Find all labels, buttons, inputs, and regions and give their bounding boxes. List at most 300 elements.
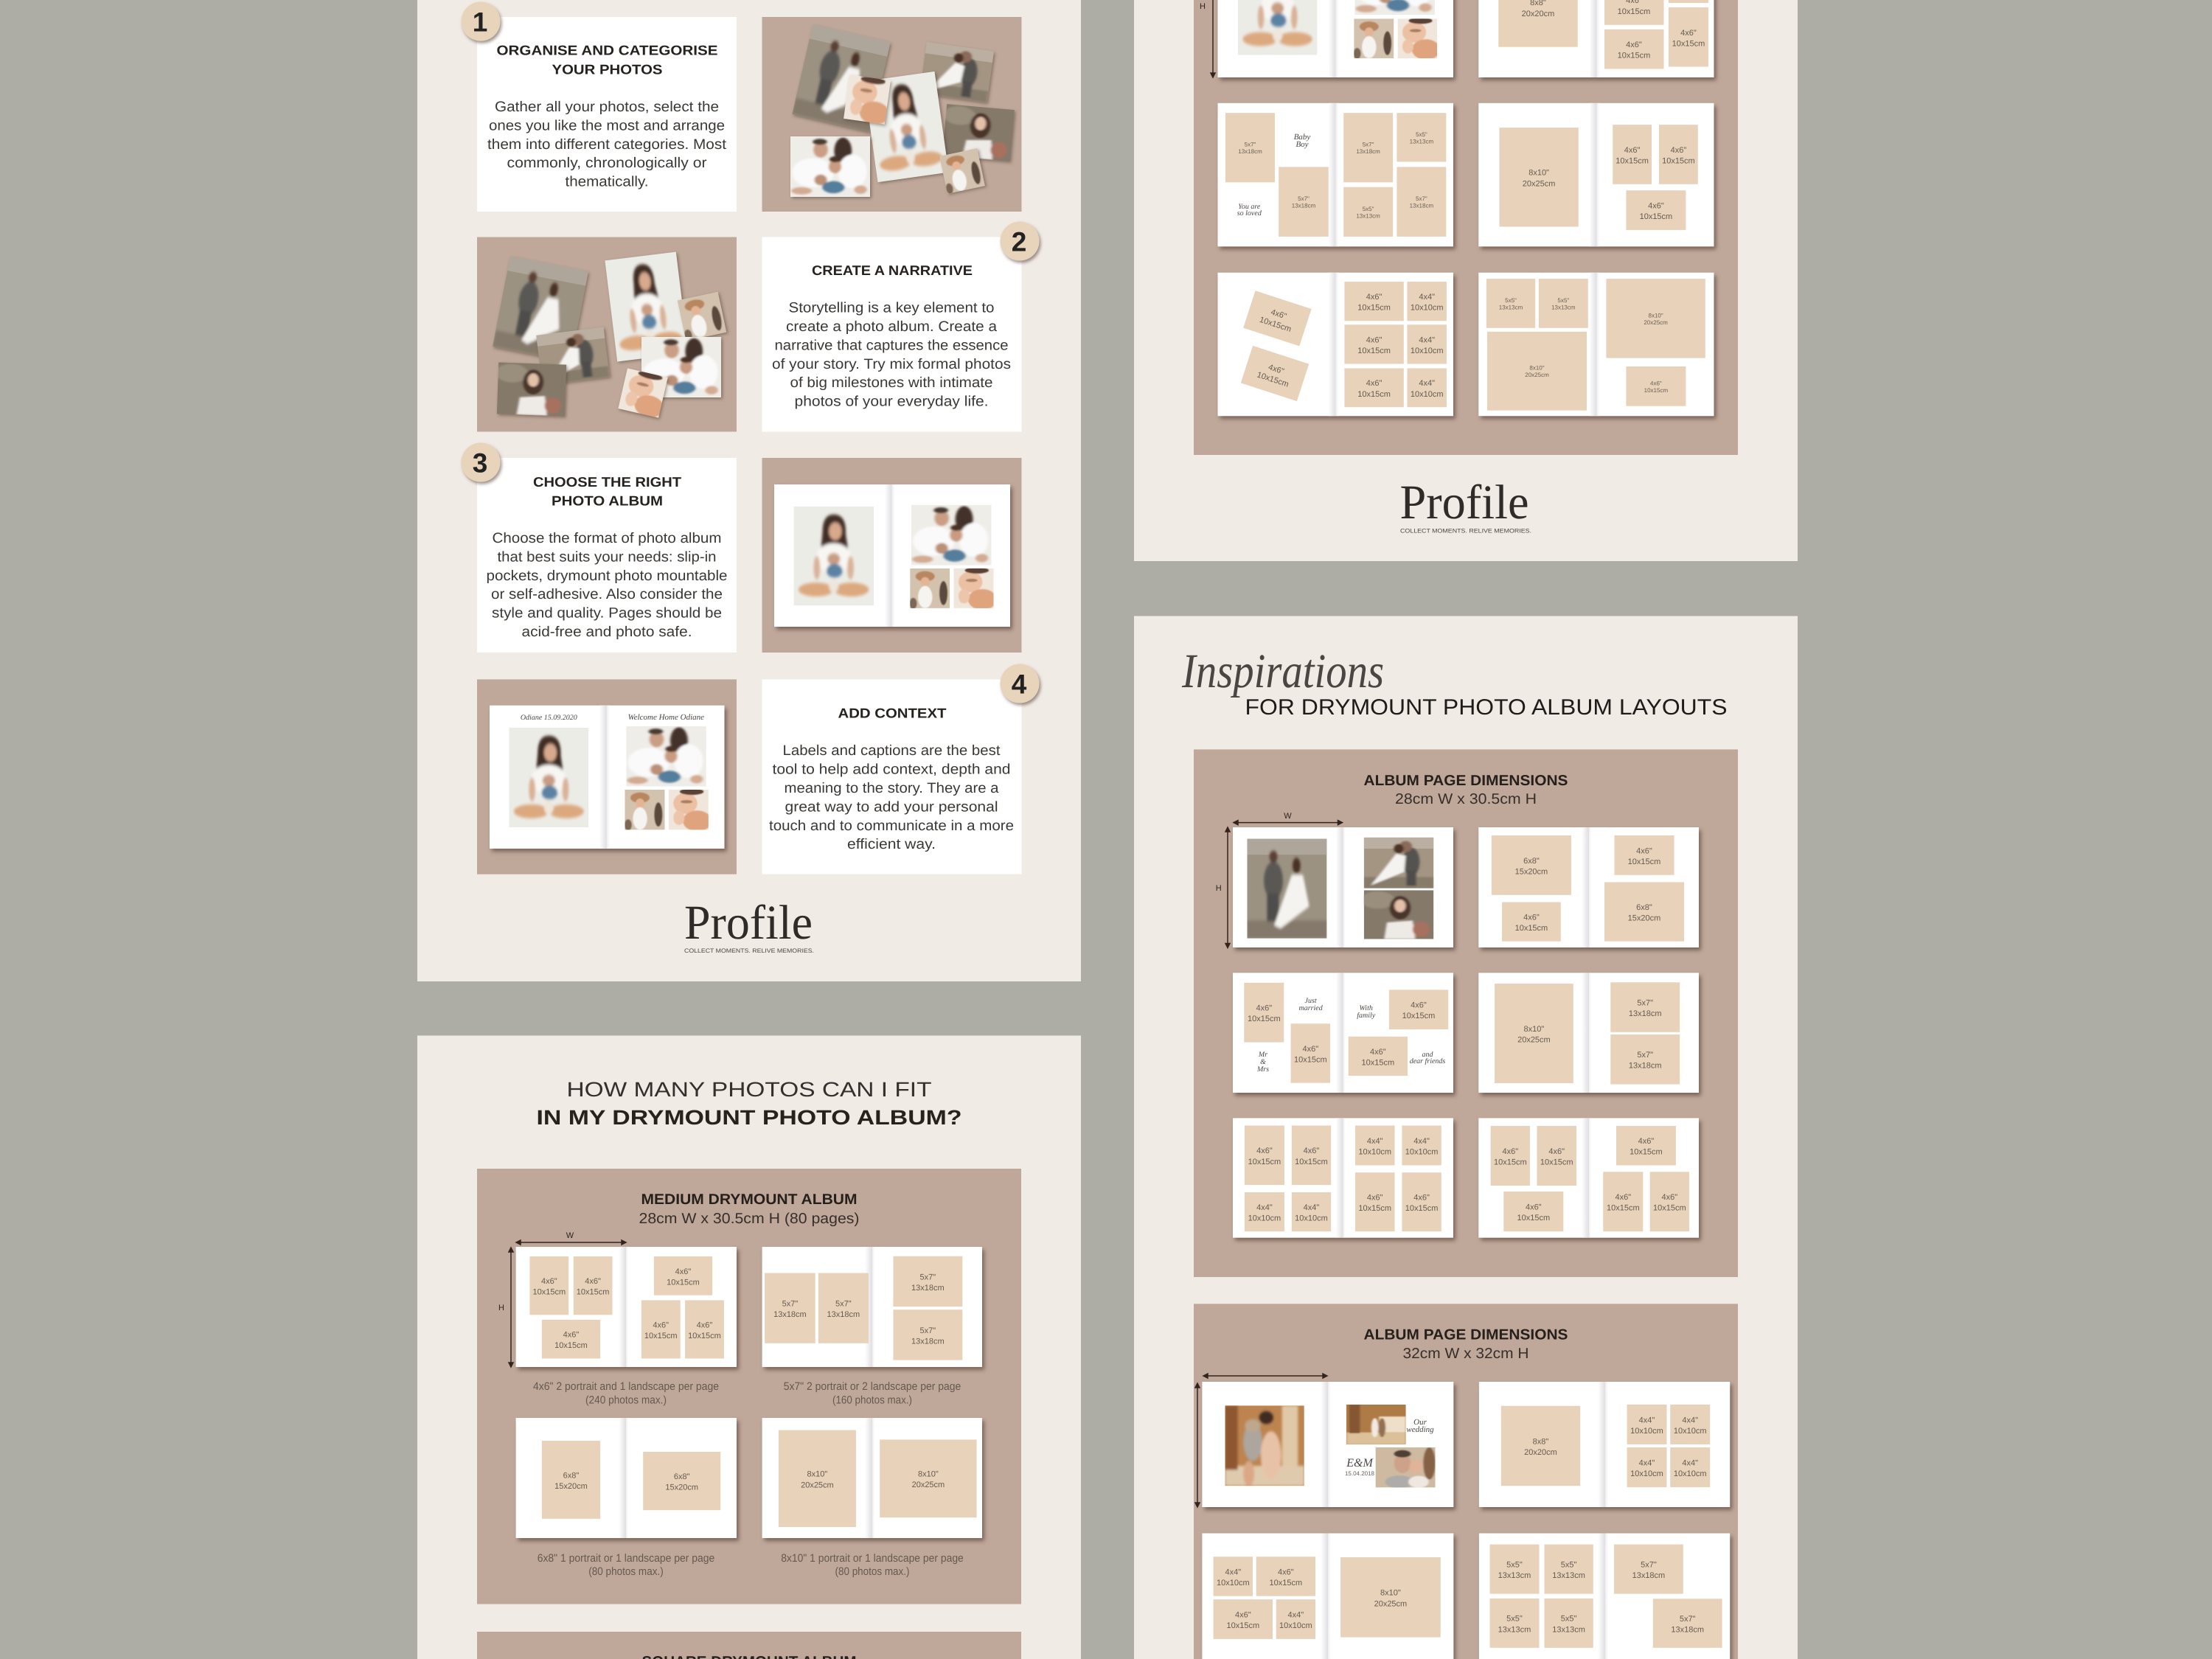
section: 28cm album xyxy=(1194,749,1738,1277)
4x6 placeholder xyxy=(1244,983,1284,1043)
card 4: add context: Labels and captions are the best xyxy=(783,742,1001,759)
4x6 placeholder xyxy=(641,1300,681,1358)
4x4 placeholder: 4x4" xyxy=(1419,335,1435,344)
4x6 placeholder: 10x15cm xyxy=(1630,1148,1663,1157)
card 1: organise and categorise: ORGANISE AND CATEGORISE xyxy=(497,43,718,58)
4x6 placeholder: 4x6" xyxy=(1370,1048,1386,1057)
spread: 6x8 layout xyxy=(516,1418,737,1538)
4x6 placeholder xyxy=(1502,902,1561,942)
4x6 placeholder xyxy=(1355,1172,1395,1231)
5x7 placeholder: 5x7" xyxy=(1637,1051,1653,1060)
4x4 placeholder: 10x10cm xyxy=(1248,1214,1281,1222)
5x7 placeholder: 5x7" xyxy=(1245,142,1256,148)
4x6 placeholder: 10x15cm xyxy=(1653,1204,1686,1213)
4x6 placeholder: 10x15cm xyxy=(1618,52,1650,60)
5x5 placeholder: 13x13cm xyxy=(1410,138,1433,145)
4x4 placeholder: 10x10cm xyxy=(1630,1427,1663,1436)
spread: wedding photos xyxy=(1202,1382,1453,1507)
4x6 placeholder xyxy=(1616,1126,1676,1165)
script caption: Mr xyxy=(1258,1051,1267,1059)
card 2: create a narrative: photos of your everyday life. xyxy=(795,394,988,410)
card 1: organise and categorise: them into different categories. Most xyxy=(487,136,727,153)
4x4 placeholder: 4x4" xyxy=(1639,1458,1655,1467)
height arrow xyxy=(1200,0,1215,77)
4x6 placeholder: 4x6" xyxy=(1366,379,1382,388)
script caption xyxy=(1256,1051,1269,1074)
4x6 placeholder: 4x6" xyxy=(1680,29,1697,38)
tilted 4x6 placeholder xyxy=(1241,346,1309,401)
5x7 placeholder: 13x18cm xyxy=(827,1310,860,1319)
card 4: add context: touch and to communicate in a more xyxy=(769,818,1014,834)
8x10 placeholder: 8x10" xyxy=(1528,169,1549,178)
card 3: choose the right photo album: acid-free and photo safe. xyxy=(522,624,692,640)
5x7 placeholder: 5x7" xyxy=(835,1299,852,1308)
8x10 placeholder: 8x10" xyxy=(1380,1589,1401,1598)
4x4 placeholder: 4x4" xyxy=(1419,379,1435,388)
5x5 placeholder: 13x13cm xyxy=(1498,1625,1531,1634)
4x6 placeholder: 4x6" xyxy=(1636,846,1652,855)
height arrow xyxy=(1195,1383,1200,1507)
5x5 placeholder: 5x5" xyxy=(1561,1615,1577,1624)
4x6 placeholder: 4x6" xyxy=(541,1277,557,1286)
8x8 placeholder xyxy=(1498,0,1578,47)
Profile logo: COLLECT MOMENTS. RELIVE MEMORIES. xyxy=(684,947,814,954)
4x6 placeholder: 10x15cm xyxy=(1615,156,1649,165)
photo collage 1 xyxy=(762,17,1022,212)
5x7 placeholder: 5x7" xyxy=(1641,1560,1657,1569)
tan section xyxy=(1194,0,1738,455)
card 2: create a narrative: Storytelling is a key element to xyxy=(789,300,995,316)
caption: 8x10" 1 portrait or 1 landscape per page xyxy=(781,1552,964,1565)
4x6 placeholder xyxy=(529,1256,568,1315)
script caption: Just xyxy=(1305,997,1317,1005)
8x10 placeholder: 20x25cm xyxy=(1525,372,1549,378)
Profile logo: Profile xyxy=(1399,476,1529,529)
5x7 placeholder xyxy=(818,1273,869,1343)
4x4 placeholder xyxy=(1407,282,1447,321)
spread: six 4x6 layout xyxy=(1478,1118,1699,1238)
8x8 placeholder xyxy=(1501,1406,1580,1486)
8x10 placeholder xyxy=(1495,984,1573,1083)
card 1: organise and categorise: Gather all your photos, select the xyxy=(495,99,719,115)
caption xyxy=(533,1380,719,1407)
6x8 placeholder xyxy=(643,1452,720,1510)
5x5 placeholder: 5x5" xyxy=(1557,297,1569,304)
4x6 placeholder xyxy=(1613,125,1652,184)
5x5 placeholder: 13x13cm xyxy=(1552,1625,1585,1634)
4x6 placeholder: 4x6" xyxy=(1523,913,1540,922)
number badge 4 xyxy=(1000,664,1040,703)
8x10 placeholder: 8x10" xyxy=(1649,312,1663,319)
4x6 placeholder xyxy=(1245,1125,1284,1185)
4x6 placeholder xyxy=(1344,282,1404,321)
script caption: married xyxy=(1298,1004,1324,1012)
5x7 placeholder: 13x18cm xyxy=(1238,148,1262,155)
4x6 placeholder: 4x6" xyxy=(1661,1193,1677,1202)
section: 32cm album: 32cm W x 32cm H xyxy=(1402,1346,1529,1362)
card 3: choose the right photo album: or self-adhesive. Also consider the xyxy=(491,586,723,602)
6x8 placeholder: 15x20cm xyxy=(665,1484,698,1492)
4x6 placeholder: 4x6" xyxy=(1366,293,1382,302)
heading: Inspirations xyxy=(1181,644,1384,698)
4x6 placeholder: 4x6" xyxy=(1638,1137,1654,1146)
5x7 placeholder: 5x7" xyxy=(1298,195,1310,202)
5x5 placeholder: 5x5" xyxy=(1506,1560,1523,1569)
script caption: Baby xyxy=(1294,133,1310,142)
4x6 placeholder: 10x15cm xyxy=(1295,1158,1328,1166)
4x6 placeholder: 4x6" xyxy=(1304,1147,1319,1155)
4x4 placeholder xyxy=(1627,1405,1666,1444)
4x6 placeholder xyxy=(1650,1172,1689,1231)
4x6 placeholder: 4x6" xyxy=(1235,1610,1251,1619)
script caption: & xyxy=(1260,1058,1266,1066)
4x6 placeholder xyxy=(1214,1599,1273,1639)
height arrow xyxy=(498,1248,513,1367)
width arrow: W xyxy=(566,1231,574,1240)
spread: 4x6 and 4x4 layout xyxy=(1233,1118,1453,1238)
4x6 placeholder xyxy=(1604,0,1663,25)
caption xyxy=(538,1552,714,1578)
card 4: add context: efficient way. xyxy=(847,836,936,852)
4x6 placeholder: 10x15cm xyxy=(1628,858,1660,866)
6x8 placeholder: 15x20cm xyxy=(554,1482,588,1491)
script caption: Mrs xyxy=(1256,1065,1269,1074)
spread: photo example xyxy=(1218,0,1453,77)
panel: inspirations xyxy=(1134,616,1798,1659)
script caption: Boy xyxy=(1295,140,1309,149)
width arrow: W xyxy=(1284,812,1292,821)
4x6 placeholder: 4x6" xyxy=(1278,1568,1294,1576)
spread: 5x7 and 5x5 layout xyxy=(1218,103,1453,246)
4x4 placeholder: 10x10cm xyxy=(1674,1427,1707,1436)
caption xyxy=(781,1552,964,1578)
album spread with captions xyxy=(477,679,737,874)
number badge 2: 2 xyxy=(1012,227,1026,257)
4x6 placeholder: 10x15cm xyxy=(1618,7,1650,16)
5x7 placeholder xyxy=(765,1273,815,1343)
card 2: create a narrative xyxy=(762,237,1022,432)
script caption: wedding xyxy=(1406,1425,1434,1434)
4x6 placeholder xyxy=(1669,0,1708,3)
4x6 placeholder xyxy=(1344,369,1404,407)
4x6 placeholder: 4x6" xyxy=(1302,1045,1318,1054)
8x10 placeholder: 20x25cm xyxy=(1644,319,1668,326)
4x6 placeholder: 4x6" xyxy=(1256,1147,1273,1155)
panel: how many photos xyxy=(417,1035,1081,1659)
4x6 placeholder: 4x6" xyxy=(1548,1147,1565,1156)
4x6 placeholder: 10x15cm xyxy=(577,1288,609,1297)
5x7 placeholder xyxy=(893,1310,962,1360)
5x7 placeholder: 5x7" xyxy=(1363,142,1374,148)
4x4 placeholder: 10x10cm xyxy=(1674,1470,1707,1478)
8x10 placeholder xyxy=(779,1430,856,1527)
4x6 placeholder xyxy=(1669,7,1708,66)
4x6 placeholder: 10x15cm xyxy=(1644,387,1668,394)
8x10 placeholder: 8x10" xyxy=(1524,1025,1544,1034)
4x4 placeholder: 4x4" xyxy=(1225,1568,1241,1576)
4x6 placeholder xyxy=(1615,835,1674,875)
4x4 placeholder: 10x10cm xyxy=(1295,1214,1328,1222)
4x4 placeholder: 10x10cm xyxy=(1358,1147,1391,1156)
script caption xyxy=(1237,203,1262,218)
8x10 placeholder: 20x25cm xyxy=(1523,179,1555,188)
photo collage 2 xyxy=(477,237,737,432)
height arrow xyxy=(1216,827,1230,948)
spread: 8x10 and 4x6 layout xyxy=(1478,103,1714,246)
8x10 placeholder xyxy=(1340,1557,1441,1637)
4x6 placeholder: 4x6" xyxy=(697,1321,712,1329)
4x6 placeholder: 4x6" xyxy=(1413,1193,1430,1202)
card 3: choose the right photo album: that best suits your needs: slip-in xyxy=(497,549,717,565)
4x6 placeholder: 10x15cm xyxy=(644,1332,678,1340)
4x6 placeholder xyxy=(1603,1172,1643,1231)
4x4 placeholder: 10x10cm xyxy=(1405,1147,1438,1156)
4x6 placeholder xyxy=(542,1320,600,1358)
5x5 placeholder xyxy=(1397,113,1446,161)
spread: 8x10 and 5x7 layout xyxy=(1478,973,1699,1093)
4x4 placeholder: 10x10cm xyxy=(1217,1579,1250,1587)
5x7 placeholder xyxy=(1225,113,1275,182)
spread: 8x10 layout xyxy=(762,1418,982,1538)
width arrow xyxy=(516,1231,626,1245)
spread: mixed large layout xyxy=(1478,273,1714,416)
card 3: choose the right photo album xyxy=(477,458,737,653)
card 4: add context: tool to help add context, depth and xyxy=(773,761,1010,777)
tilted 4x6 placeholder: 10x15cm xyxy=(1259,316,1293,334)
4x4 placeholder: 10x10cm xyxy=(1411,390,1444,399)
4x6 placeholder xyxy=(1402,1172,1441,1231)
8x10 placeholder: 20x25cm xyxy=(1517,1036,1551,1045)
tilted 4x6 placeholder xyxy=(1243,291,1312,346)
5x7 placeholder: 13x18cm xyxy=(773,1310,807,1319)
4x4 placeholder xyxy=(1245,1192,1284,1231)
4x4 placeholder xyxy=(1407,324,1447,364)
5x5 placeholder xyxy=(1539,279,1588,328)
8x8 placeholder: 20x20cm xyxy=(1524,1448,1557,1457)
5x7 placeholder: 13x18cm xyxy=(1671,1625,1704,1634)
5x7 placeholder: 5x7" xyxy=(1680,1615,1696,1624)
4x6 placeholder: 10x15cm xyxy=(1515,924,1548,933)
5x5 placeholder: 5x5" xyxy=(1505,297,1517,304)
number badge 2 xyxy=(1000,221,1040,261)
4x6 placeholder: 4x6" xyxy=(675,1267,691,1276)
section: medium drymount album xyxy=(477,1169,1021,1604)
4x6 placeholder: 4x6" xyxy=(1367,1193,1383,1202)
4x6 placeholder: 10x15cm xyxy=(1540,1158,1573,1166)
number badge 1: 1 xyxy=(473,7,487,37)
number badge 3 xyxy=(462,442,500,482)
5x7 placeholder: 13x18cm xyxy=(1629,1062,1662,1071)
script caption xyxy=(1298,997,1324,1012)
5x7 placeholder: 5x7" xyxy=(919,1326,936,1335)
4x6 placeholder xyxy=(1626,366,1686,406)
tilted 4x6 placeholder: 10x15cm xyxy=(1256,370,1290,389)
card 1: organise and categorise: YOUR PHOTOS xyxy=(552,62,662,77)
Profile logo: COLLECT MOMENTS. RELIVE MEMORIES. xyxy=(1400,528,1531,534)
4x4 placeholder: 4x4" xyxy=(1419,293,1435,302)
8x10 placeholder: 8x10" xyxy=(1529,365,1545,372)
4x4 placeholder xyxy=(1670,1447,1710,1487)
4x4 placeholder: 4x4" xyxy=(1639,1416,1655,1425)
card 2: create a narrative: create a photo album. Create a xyxy=(786,319,997,335)
caption xyxy=(784,1380,961,1407)
4x6 placeholder xyxy=(1503,1192,1563,1231)
date caption: 15.04.2018 xyxy=(1345,1470,1375,1477)
5x5 placeholder: 5x5" xyxy=(1363,206,1374,212)
4x6 placeholder: 4x6" xyxy=(1256,1004,1272,1013)
card 2: create a narrative: of your story. Try mix formal photos xyxy=(772,356,1011,372)
4x6 placeholder xyxy=(654,1256,712,1295)
heading: FOR DRYMOUNT PHOTO ALBUM LAYOUTS xyxy=(1245,695,1727,720)
card 4: add context: ADD CONTEXT xyxy=(838,706,947,721)
4x6 placeholder: 4x6" xyxy=(1626,41,1642,49)
4x6 placeholder: 4x6" xyxy=(1650,380,1662,386)
4x6 placeholder xyxy=(1389,990,1448,1029)
script caption: so loved xyxy=(1237,209,1262,218)
card 1: organise and categorise: commonly, chronologically or xyxy=(507,155,707,171)
heading: HOW MANY PHOTOS CAN I FIT xyxy=(566,1078,932,1101)
8x10 placeholder: 8x10" xyxy=(918,1470,939,1478)
card 1: organise and categorise xyxy=(477,17,737,212)
4x4 placeholder: 10x10cm xyxy=(1411,304,1444,313)
8x10 placeholder: 20x25cm xyxy=(801,1481,834,1489)
8x8 placeholder: 20x20cm xyxy=(1522,10,1554,18)
5x7 placeholder: 5x7" xyxy=(1637,998,1653,1007)
4x4 placeholder: 4x4" xyxy=(1256,1203,1273,1212)
4x6 placeholder: 10x15cm xyxy=(667,1278,700,1287)
4x4 placeholder: 4x4" xyxy=(1287,1610,1304,1619)
8x10 placeholder: 8x10" xyxy=(807,1470,827,1479)
4x4 placeholder xyxy=(1670,1405,1710,1444)
5x5 placeholder xyxy=(1490,1599,1540,1648)
heading xyxy=(537,1078,961,1129)
card 3: choose the right photo album: style and quality. Pages should be xyxy=(492,605,722,622)
height arrow: H xyxy=(1216,884,1222,893)
5x7 placeholder xyxy=(1614,1545,1683,1594)
4x4 placeholder: 4x4" xyxy=(1413,1137,1430,1146)
4x6 placeholder: 10x15cm xyxy=(554,1341,588,1350)
tilted 4x6 placeholder: 4x6" xyxy=(1270,307,1287,321)
4x4 placeholder: 10x10cm xyxy=(1279,1621,1312,1630)
height arrow: H xyxy=(498,1304,504,1312)
6x8 placeholder: 15x20cm xyxy=(1515,867,1548,876)
5x7 placeholder: 13x18cm xyxy=(911,1337,945,1346)
section: medium drymount album: 28cm W x 30.5cm H (80 pages) xyxy=(639,1211,860,1227)
caption: (80 photos max.) xyxy=(835,1565,910,1578)
caption: 5x7" 2 portrait or 2 landscape per page xyxy=(784,1380,961,1393)
4x4 placeholder: 10x10cm xyxy=(1630,1470,1663,1478)
4x4 placeholder xyxy=(1355,1125,1395,1165)
caption: (80 photos max.) xyxy=(588,1565,664,1578)
5x5 placeholder: 13x13cm xyxy=(1356,212,1380,219)
4x4 placeholder: 10x10cm xyxy=(1411,347,1444,355)
number badge 1 xyxy=(462,1,500,41)
section: 32cm album xyxy=(1194,1304,1738,1659)
5x5 placeholder xyxy=(1343,187,1393,237)
section: 32cm album: ALBUM PAGE DIMENSIONS xyxy=(1364,1327,1568,1343)
5x7 placeholder: 13x18cm xyxy=(1356,148,1380,155)
4x4 placeholder: 4x4" xyxy=(1367,1137,1383,1146)
width arrow xyxy=(1234,812,1342,825)
5x7 placeholder: 13x18cm xyxy=(1629,1009,1662,1018)
script caption: You are xyxy=(1238,203,1261,211)
width arrow xyxy=(1203,1374,1327,1378)
4x4 placeholder xyxy=(1276,1599,1315,1639)
4x4 placeholder xyxy=(1402,1125,1441,1165)
4x6 placeholder: 10x15cm xyxy=(1517,1214,1550,1222)
section: 28cm album: 28cm W x 30.5cm H xyxy=(1395,791,1537,807)
4x6 placeholder xyxy=(574,1256,612,1315)
4x6 placeholder: 10x15cm xyxy=(1662,156,1695,165)
8x10 placeholder xyxy=(1500,128,1579,227)
caption: 6x8" 1 portrait or 1 landscape per page xyxy=(538,1552,714,1565)
card 4: add context: great way to add your personal xyxy=(785,799,998,815)
spread: tilted and grid layout xyxy=(1218,273,1453,416)
card 1: organise and categorise: ones you like the most and arrange xyxy=(489,117,725,133)
5x7 placeholder: 5x7" xyxy=(1416,195,1427,202)
4x6 placeholder xyxy=(1291,1023,1330,1083)
5x7 placeholder: 5x7" xyxy=(782,1299,798,1308)
script caption: dear friends xyxy=(1410,1057,1445,1065)
4x6 placeholder: 4x6" xyxy=(1366,335,1382,344)
heading: IN MY DRYMOUNT PHOTO ALBUM? xyxy=(537,1106,961,1129)
4x6 placeholder: 10x15cm xyxy=(1357,304,1391,313)
5x7 placeholder xyxy=(1397,167,1446,237)
4x6 placeholder: 4x6" xyxy=(653,1321,669,1329)
6x8 placeholder: 6x8" xyxy=(674,1472,690,1481)
4x6 placeholder: 10x15cm xyxy=(1494,1158,1527,1166)
album spread with photos xyxy=(762,458,1022,653)
card 2: create a narrative: of big milestones with intimate xyxy=(790,375,992,391)
8x8 placeholder: 8x8" xyxy=(1533,1437,1548,1446)
5x7 placeholder xyxy=(1653,1599,1722,1648)
caption: (160 photos max.) xyxy=(832,1394,912,1407)
6x8 placeholder xyxy=(542,1441,600,1519)
4x6 placeholder xyxy=(1626,190,1686,230)
4x6 placeholder xyxy=(1292,1125,1331,1185)
4x6 placeholder: 10x15cm xyxy=(1357,347,1391,355)
Profile logo: Profile xyxy=(684,896,813,950)
card 3: choose the right photo album: CHOOSE THE RIGHT xyxy=(533,474,682,490)
4x6 placeholder xyxy=(1659,125,1698,184)
4x6 placeholder: 4x6" xyxy=(1411,1001,1427,1010)
5x5 placeholder: 5x5" xyxy=(1561,1560,1577,1569)
8x10 placeholder: 20x25cm xyxy=(1374,1599,1407,1608)
number badge 3: 3 xyxy=(473,448,487,478)
5x5 placeholder: 5x5" xyxy=(1416,131,1427,138)
4x6 placeholder: 10x15cm xyxy=(1248,1158,1281,1166)
card 3: choose the right photo album: Choose the format of photo album xyxy=(493,530,721,546)
5x7 placeholder xyxy=(1343,113,1393,182)
6x8 placeholder xyxy=(1492,835,1571,895)
5x7 placeholder: 13x18cm xyxy=(1292,203,1316,209)
4x4 placeholder: 4x4" xyxy=(1304,1203,1319,1212)
4x4 placeholder xyxy=(1292,1192,1331,1231)
4x6 placeholder: 10x15cm xyxy=(688,1332,721,1340)
4x4 placeholder xyxy=(1214,1557,1253,1596)
script caption xyxy=(1357,1004,1376,1020)
spread: 5x7 layout xyxy=(762,1247,982,1367)
card 1: organise and categorise: thematically. xyxy=(565,174,649,190)
script caption: and xyxy=(1422,1051,1433,1059)
spread: 5x5 and 5x7 layout xyxy=(1479,1534,1730,1659)
script caption: family xyxy=(1357,1012,1376,1020)
4x6 placeholder: 10x15cm xyxy=(1672,40,1705,49)
panel: four tips xyxy=(417,0,1081,981)
4x6 placeholder xyxy=(1604,29,1663,69)
4x6 placeholder: 4x6" xyxy=(1624,146,1641,155)
5x7 placeholder: 5x7" xyxy=(919,1273,936,1281)
